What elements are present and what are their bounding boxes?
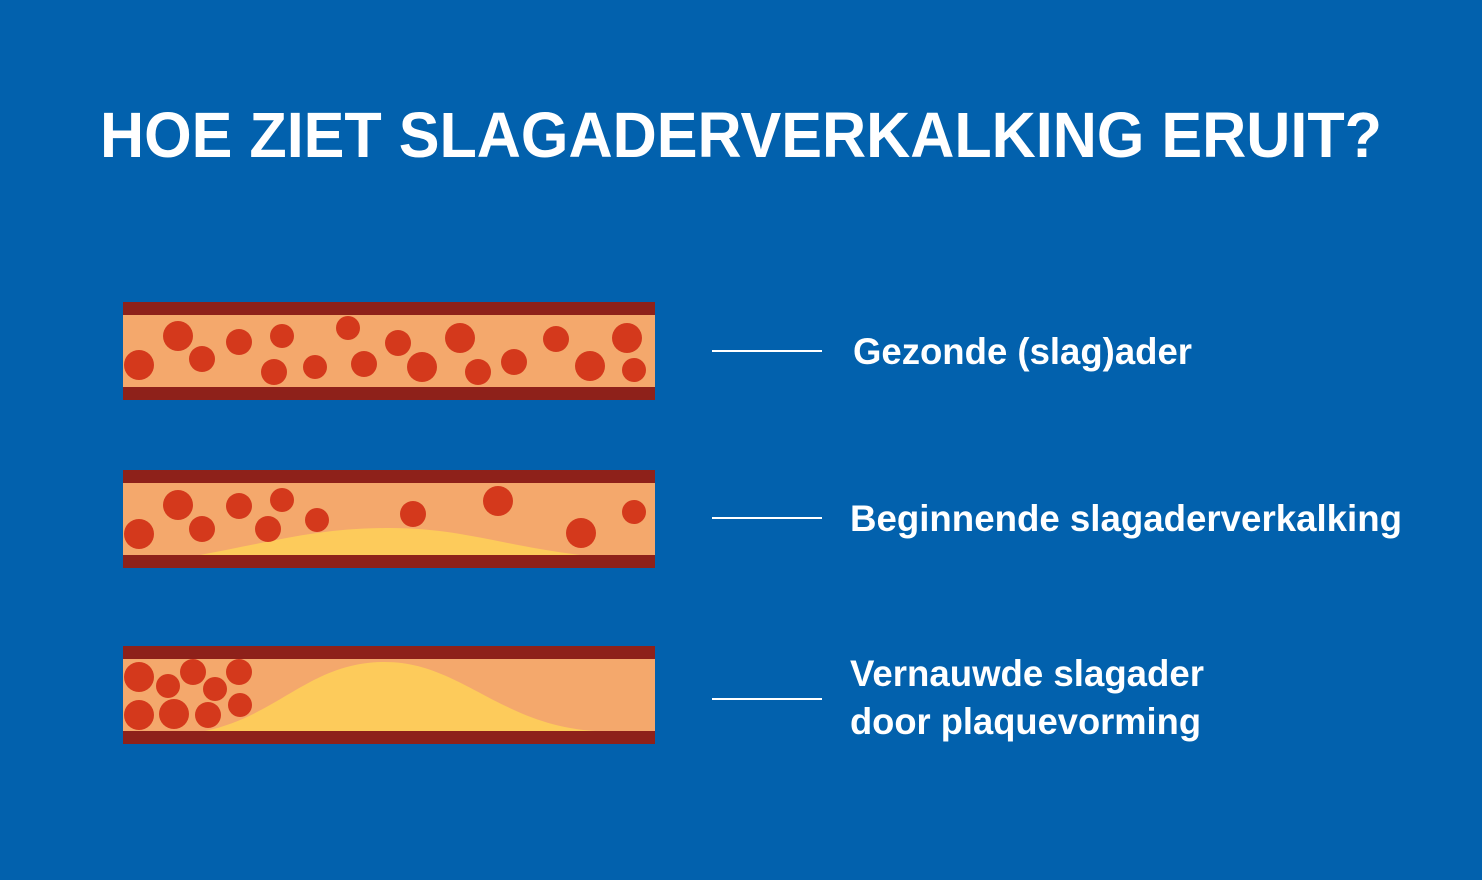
vessel: narrowed <box>123 646 655 744</box>
connector lines <box>712 351 822 699</box>
label: narrowed: door plaquevorming <box>850 701 1201 742</box>
plaque large <box>205 662 595 731</box>
plaque small <box>200 528 580 555</box>
title: HOE ZIET SLAGADERVERKALKING ERUIT? <box>100 99 1382 171</box>
label: healthy: Gezonde (slag)ader <box>853 331 1192 372</box>
vessel: healthy <box>123 302 655 400</box>
vessel: beginning plaque <box>123 470 655 568</box>
label: beginning: Beginnende slagaderverkalking <box>850 498 1402 539</box>
label: narrowed <box>850 653 1204 742</box>
label: narrowed: Vernauwde slagader <box>850 653 1204 694</box>
